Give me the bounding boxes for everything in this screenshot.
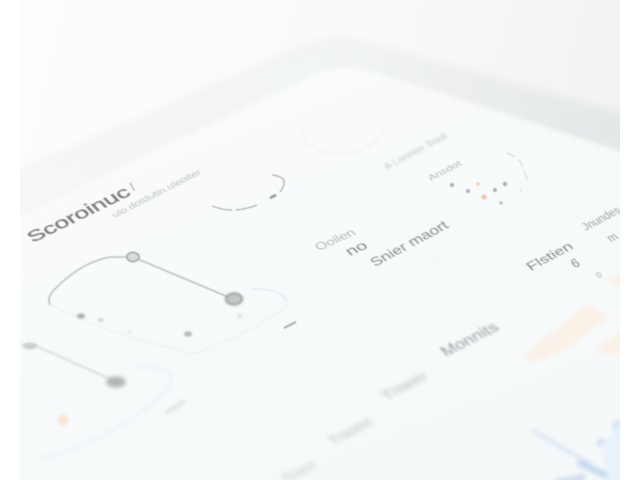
data dots [77, 313, 243, 337]
tablet screen [360, 72, 620, 480]
label: Monnits [438, 320, 503, 360]
bar chart: orange [522, 271, 625, 363]
heading: Snier maort [367, 218, 452, 269]
node left [23, 342, 37, 350]
small value: 0 [594, 270, 604, 280]
label: Flstien [523, 240, 576, 273]
label right: Jnundes [579, 204, 624, 233]
node top [127, 252, 139, 262]
panel: scatter [381, 131, 527, 205]
label: Tnoen [324, 414, 376, 448]
dividers [367, 190, 580, 467]
icon: dashed gauge arc [212, 175, 284, 210]
panel: score header [27, 170, 201, 242]
sublabel: Ansdot [425, 159, 465, 183]
scatter dots [450, 182, 522, 205]
chart line [49, 257, 233, 305]
label: Ooilen [313, 227, 359, 253]
panel: line chart upper [48, 251, 297, 338]
bar chart: blue [532, 420, 625, 480]
caption tick [284, 322, 296, 328]
panel outline [40, 367, 172, 458]
row labels [277, 320, 503, 480]
chart line [22, 344, 110, 379]
node right [226, 294, 242, 304]
value right: m [605, 231, 621, 244]
value: no [341, 238, 371, 258]
accent dot orange [58, 415, 68, 425]
panel outline [52, 295, 287, 353]
panel: center stats [315, 221, 450, 266]
label: A Lonnier Sout [381, 131, 451, 172]
arc [507, 153, 527, 181]
label: Tnwer [377, 368, 432, 403]
subtitle: ulo.dotdutin.uleoiter [109, 167, 204, 220]
icon: faint ring [302, 130, 385, 155]
panel: right stats [526, 208, 620, 278]
node right [106, 376, 126, 388]
title: Scoroinuc [22, 183, 135, 246]
caption [166, 401, 185, 413]
panel: line chart lower [22, 342, 185, 426]
accent corner [252, 289, 287, 302]
background [423, 0, 620, 112]
title slash: / [126, 181, 140, 193]
tablet bezel [378, 54, 620, 150]
value: 6 [568, 256, 583, 271]
